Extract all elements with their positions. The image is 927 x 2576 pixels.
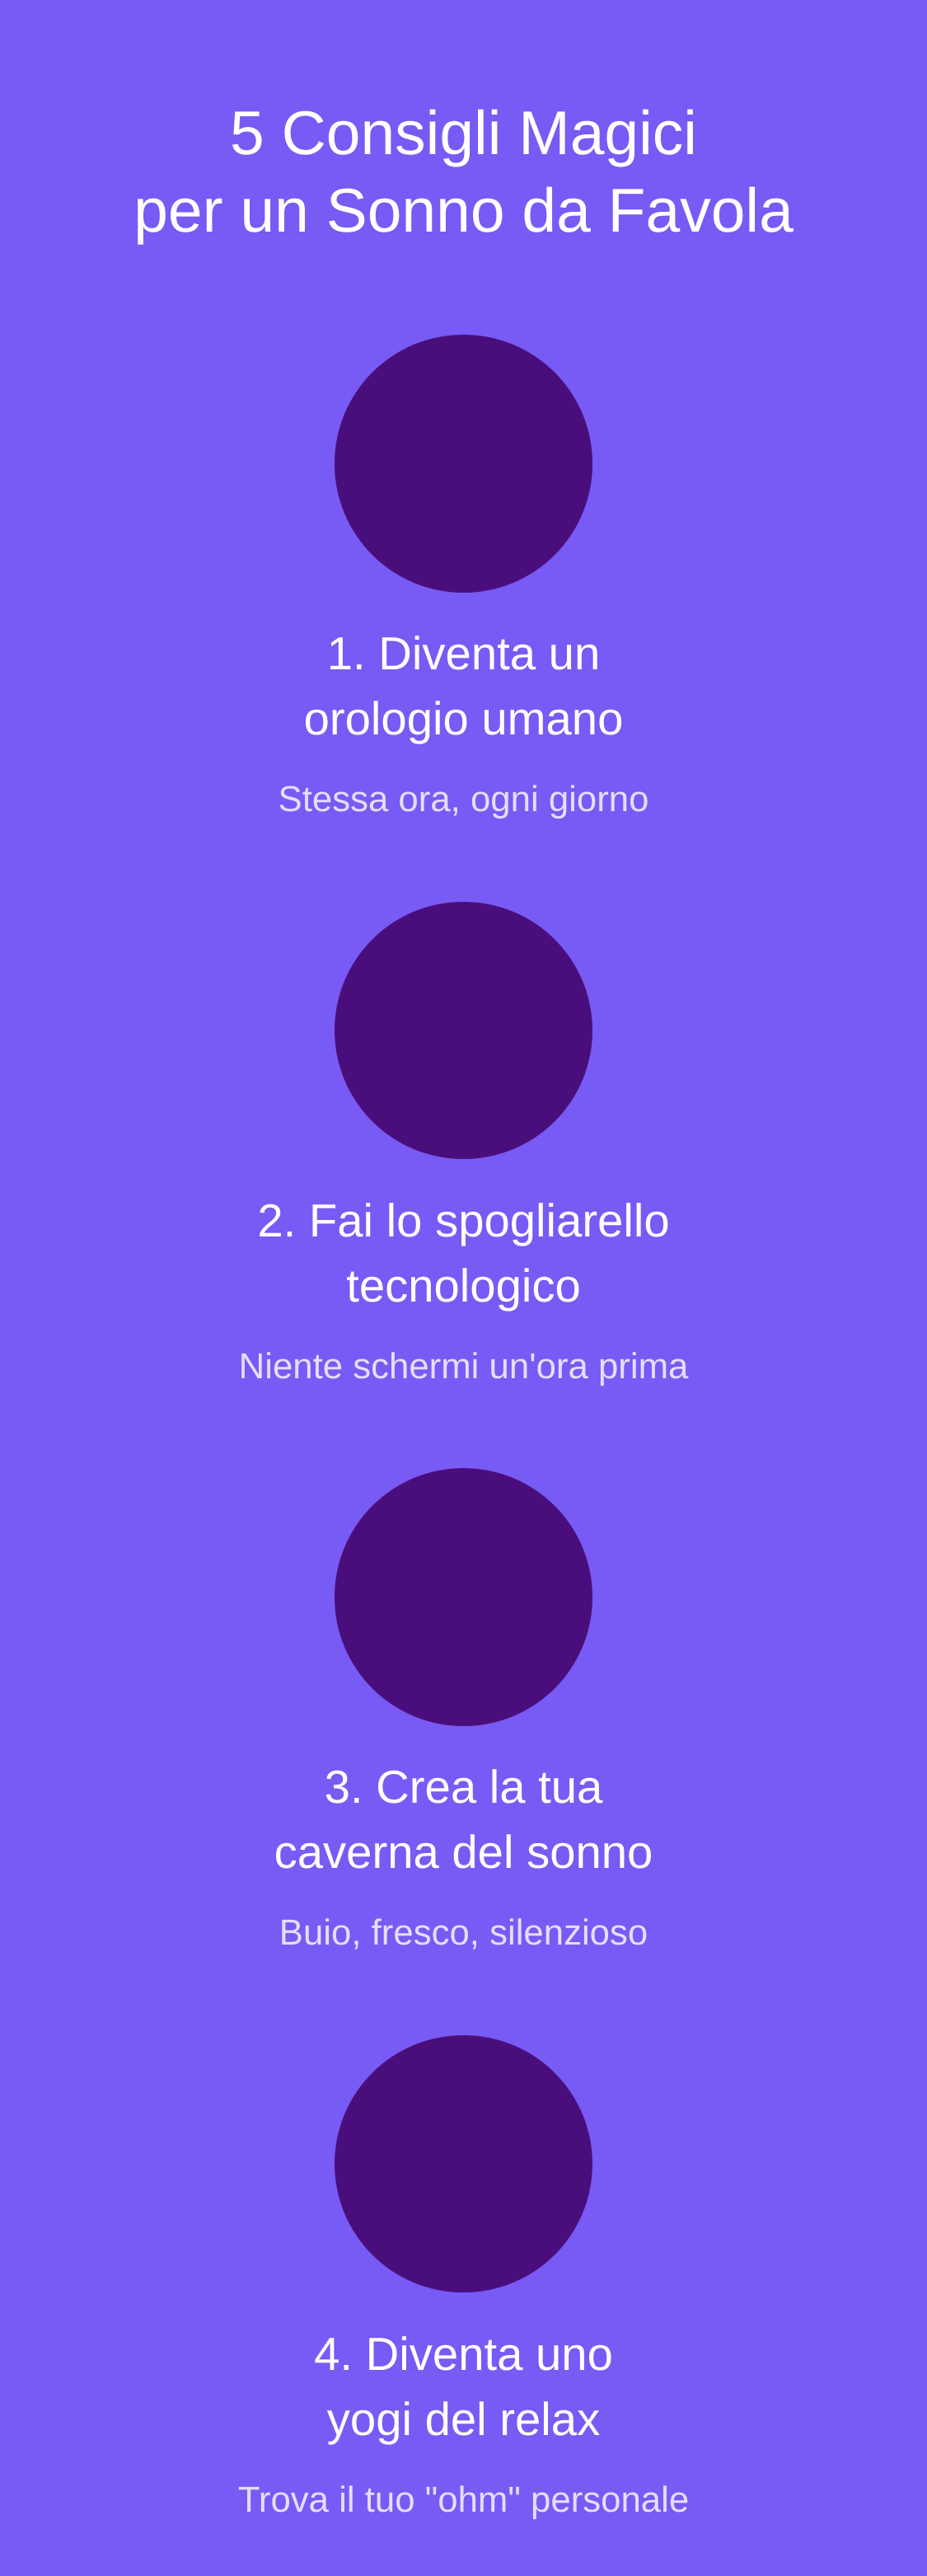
heading: tip 3 [274, 1761, 653, 1878]
heading: tip 2: tecnologico [346, 1260, 581, 1311]
heading: tip 3: caverna del sonno [274, 1826, 653, 1878]
icon: circle tip 2 [335, 902, 592, 1159]
panel: tip 1 [279, 335, 648, 819]
title: 5 Consigli Magici [230, 98, 697, 167]
icon: circle tip 1 [335, 335, 592, 593]
heading: tip 1: 1. Diventa un [327, 627, 600, 679]
text: tip 1 subtitle: Stessa ora, ogni giorno [279, 779, 648, 819]
text: tip 4 subtitle: Trova il tuo "ohm" personale [238, 2480, 689, 2520]
heading: tip 4: 4. Diventa uno [314, 2328, 613, 2380]
heading: tip 1 [304, 627, 623, 744]
icon: circle tip 4 [335, 2035, 592, 2292]
icon: circle tip 3 [335, 1468, 592, 1726]
heading: tip 2 [257, 1194, 670, 1311]
heading: tip 3: 3. Crea la tua [325, 1761, 602, 1813]
heading: tip 4: yogi del relax [327, 2392, 600, 2445]
panel: tip 3 [274, 1468, 653, 1953]
heading: tip 1: orologio umano [304, 692, 623, 744]
panel: tip 2 [239, 902, 689, 1387]
text: tip 2 subtitle: Niente schermi un'ora prima [239, 1346, 688, 1387]
heading: tip 4 [314, 2328, 613, 2445]
text: tip 3 subtitle: Buio, fresco, silenzioso [279, 1912, 648, 1953]
title: per un Sonno da Favola [133, 176, 794, 245]
panel: tip 4 [238, 2035, 689, 2520]
title [133, 98, 794, 245]
heading: tip 2: 2. Fai lo spogliarello [257, 1194, 670, 1246]
